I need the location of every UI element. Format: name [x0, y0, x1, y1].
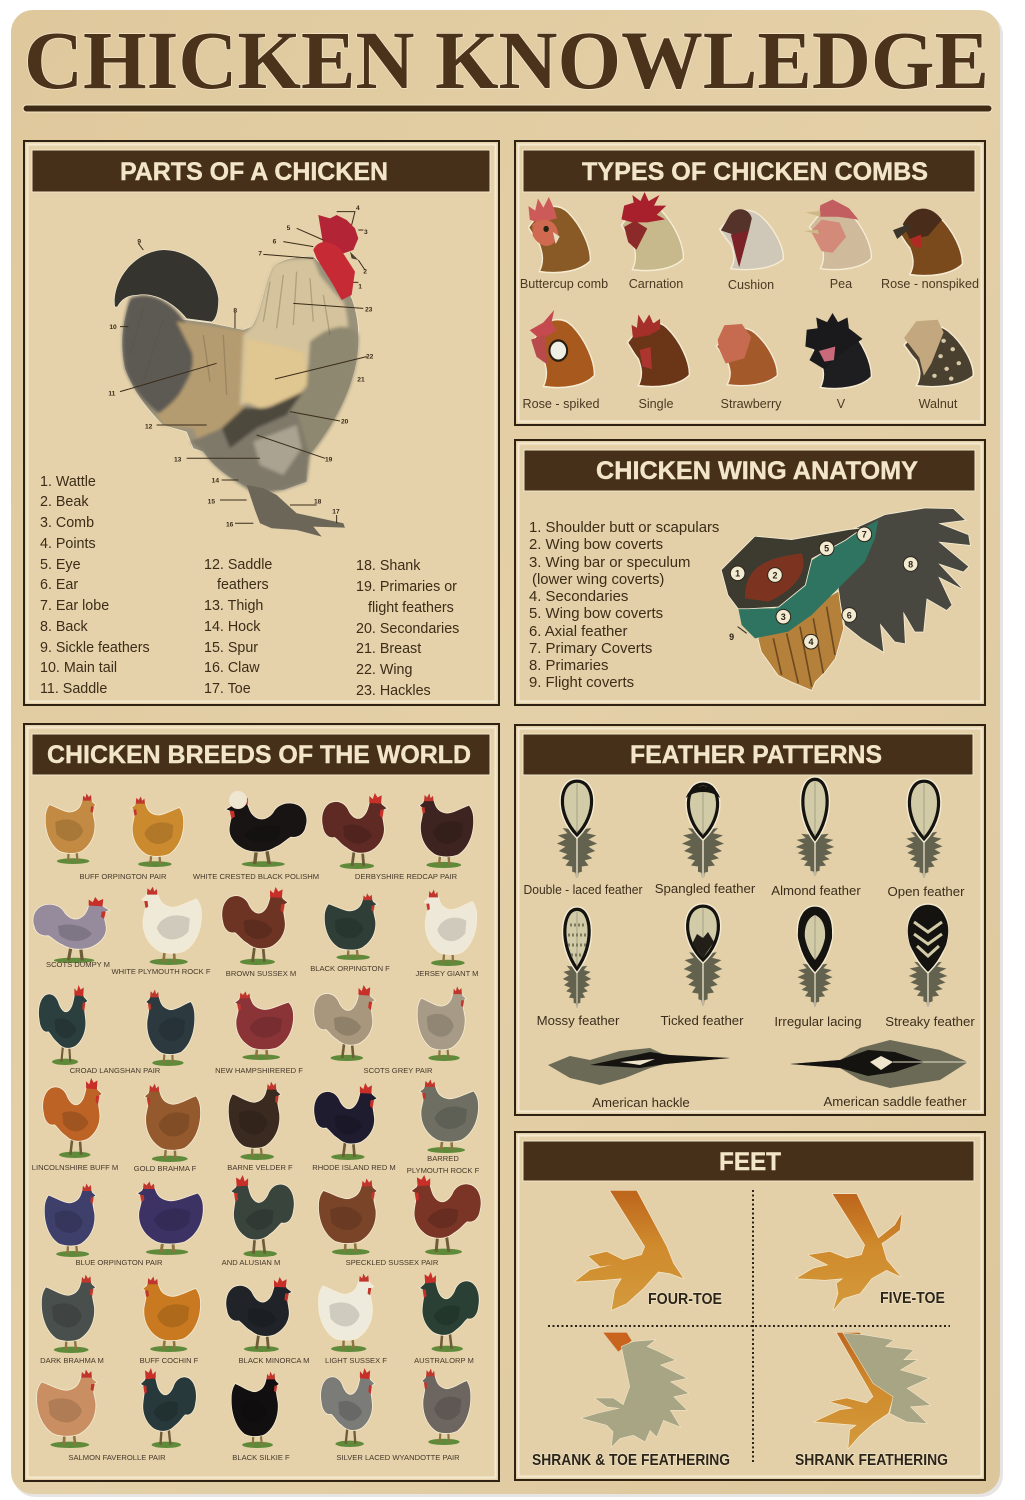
list: parts 18-23: 21. Breast [356, 641, 421, 657]
list: wing parts: 7. Primary Coverts [529, 641, 652, 657]
foot labels: FIVE-TOE [880, 1290, 945, 1307]
panel: feet [515, 1132, 985, 1480]
breed: andalusian [222, 1175, 294, 1267]
breed: silver laced wyandotte pair: SILVER LACED WYANDOTTE PAIR [336, 1453, 460, 1462]
diagram: rooster with numbered parts: 5 [287, 225, 291, 232]
breed: gold brahma: GOLD BRAHMA F [134, 1164, 197, 1173]
breed: scots grey pair [314, 985, 466, 1075]
dotted dividers [548, 1190, 950, 1462]
breed: australorp: AUSTRALORP M [414, 1356, 474, 1365]
diagram: wing with numbered parts: 9 [729, 632, 734, 642]
breed: dark brahma [40, 1275, 104, 1365]
list: parts 1-11: 11. Saddle [40, 681, 107, 697]
diagram: rooster with numbered parts: 2 [363, 268, 367, 275]
breed: gold brahma [134, 1084, 200, 1173]
diagram: rooster with numbered parts: 16 [226, 522, 234, 529]
diagram: rooster with numbered parts: 18 [314, 498, 322, 505]
comb labels: Strawberry [721, 397, 782, 411]
breed: jersey giant [415, 890, 479, 978]
feather: ticked: Ticked feather [660, 1013, 744, 1028]
feather: almond: Almond feather [771, 883, 861, 898]
title: CHICKEN KNOWLEDGE [24, 14, 989, 106]
diagram: rooster with numbered parts: 20 [341, 418, 349, 425]
diagram: rooster with numbered parts: 8 [233, 307, 237, 314]
breed: jersey giant: JERSEY GIANT M [415, 969, 479, 978]
diagram: wing with numbered parts: 2 [772, 570, 777, 580]
list: parts 18-23: flight feathers [368, 600, 454, 616]
breed: blue orpington pair: BLUE ORPINGTON PAIR [75, 1258, 163, 1267]
foot labels: SHRANK FEATHERING [795, 1452, 948, 1469]
list: wing parts: 2. Wing bow coverts [529, 537, 663, 553]
list: wing parts: 6. Axial feather [529, 624, 628, 640]
breed: australorp [414, 1272, 479, 1365]
diagram: wing with numbered parts: 7 [862, 530, 867, 540]
list: parts 18-23: 19. Primaries or [356, 579, 457, 595]
list: wing parts: 5. Wing bow coverts [529, 606, 663, 622]
list: parts 12-17: 13. Thigh [204, 598, 263, 614]
diagram: rooster with numbered parts: 11 [108, 391, 116, 398]
feather: streaky: Streaky feather [885, 1014, 975, 1029]
list: parts 1-11: 4. Points [40, 536, 96, 552]
breed: salmon faverolle pair [37, 1368, 196, 1462]
breed: rhode island red [312, 1083, 396, 1172]
comb: single [627, 314, 689, 387]
list: parts 12-17: 14. Hock [204, 619, 261, 635]
feather: spangled [655, 784, 756, 896]
list: parts 12-17: 12. Saddle [204, 557, 272, 573]
panel: feather patterns [515, 725, 985, 1115]
header: types of chicken combs [523, 150, 975, 192]
comb labels: Rose - nonspiked [881, 277, 979, 291]
list: parts 1-11: 8. Back [40, 619, 89, 635]
breed: white crested black polish: WHITE CRESTED BLACK POLISHM [193, 872, 319, 881]
breed: blue orpington pair [45, 1182, 203, 1267]
breed: black orpington [310, 893, 390, 973]
diagram: wing with numbered parts: 3 [781, 612, 786, 622]
comb: buttercup [528, 197, 590, 273]
panel: parts of a chicken [24, 141, 499, 705]
foot: four-toe [575, 1191, 683, 1310]
comb labels: Cushion [728, 278, 774, 292]
breed: scots dumpy [33, 897, 110, 969]
comb labels: Single [638, 397, 674, 411]
list: wing parts: 4. Secondaries [529, 589, 628, 605]
list: wing parts: 3. Wing bar or speculum [529, 555, 690, 571]
foot: shank and toe feathering [582, 1333, 688, 1447]
list: parts 18-23: 18. Shank [356, 558, 421, 574]
diagram: rooster with numbered parts: 9 [137, 238, 141, 245]
foot labels: SHRANK & TOE FEATHERING [532, 1452, 730, 1469]
header: feet: FEET [719, 1148, 781, 1176]
list: parts 12-17: 17. Toe [204, 681, 251, 697]
diagram: rooster with numbered parts: 6 [273, 238, 277, 245]
feather: spangled: Spangled feather [655, 881, 756, 896]
breed: brown sussex [222, 887, 296, 978]
comb labels: Pea [830, 277, 852, 291]
breed: buff cochin [140, 1277, 200, 1365]
breed: barnevelder: BARNE VELDER F [227, 1163, 293, 1172]
diagram: rooster with numbered parts: 13 [174, 457, 182, 464]
header: parts of a chicken: PARTS OF A CHICKEN [120, 158, 388, 186]
feather: american hackle: American hackle [592, 1095, 690, 1110]
breed: scots grey pair: SCOTS GREY PAIR [364, 1066, 433, 1075]
list: parts 1-11: 3. Comb [40, 515, 94, 531]
list: parts 1-11: 9. Sickle feathers [40, 640, 150, 656]
comb labels: Carnation [629, 277, 683, 291]
diagram: rooster with numbered parts: 22 [366, 353, 374, 360]
diagram: rooster with numbered parts: 3 [364, 229, 368, 236]
list: parts 1-11: 10. Main tail [40, 660, 117, 676]
list: wing parts: 1. Shoulder butt or scapulars [529, 520, 719, 536]
feather: double-laced: Double - laced feather [524, 882, 643, 897]
breed: barred plymouth rock: BARRED [427, 1154, 459, 1163]
diagram: rooster with numbered parts: 21 [357, 377, 365, 384]
feather: almond [771, 779, 861, 898]
list: wing parts: (lower wing coverts) [532, 572, 664, 588]
diagram: rooster with numbered parts: 14 [212, 477, 219, 484]
comb: walnut [904, 320, 973, 387]
breed: brown sussex: BROWN SUSSEX M [226, 969, 296, 978]
breed: buff orpington pair: BUFF ORPINGTON PAIR [79, 872, 167, 881]
breed: croad langshan pair: CROAD LANGSHAN PAIR [70, 1066, 161, 1075]
breed: barred plymouth rock: PLYMOUTH ROCK F [407, 1166, 480, 1175]
header: chicken wing anatomy [524, 450, 975, 491]
list: parts 1-11: 2. Beak [40, 494, 89, 510]
comb labels: Walnut [919, 397, 958, 411]
feather: open [888, 781, 965, 899]
breed: white plymouth rock [111, 887, 211, 976]
diagram: rooster with numbered parts: 19 [325, 457, 333, 464]
breed: black silkie [232, 1372, 290, 1462]
comb: strawberry [716, 324, 777, 386]
list: parts 12-17: 16. Claw [204, 660, 260, 676]
comb labels: V [837, 397, 846, 411]
breed: black minorca [226, 1277, 309, 1365]
list: parts 18-23: 20. Secondaries [356, 621, 459, 637]
list: parts 12-17: 15. Spur [204, 640, 258, 656]
breed: croad langshan pair [39, 985, 194, 1075]
comb labels: Rose - spiked [522, 397, 600, 411]
comb: cushion [720, 209, 783, 270]
diagram: wing with numbered parts: 5 [824, 544, 829, 554]
diagram: rooster with numbered parts: 17 [332, 508, 340, 515]
comb labels [520, 277, 979, 411]
header: chicken breeds of the world [32, 734, 490, 775]
header: feet [523, 1141, 974, 1181]
breed: black silkie: BLACK SILKIE F [232, 1453, 290, 1462]
diagram: wing with numbered parts [722, 508, 970, 690]
feather: ticked [660, 906, 744, 1028]
comb: carnation [621, 192, 683, 271]
breed: light sussex [319, 1274, 387, 1365]
comb: rose spiked [530, 310, 594, 388]
breed: new hampshire red: NEW HAMPSHIRERED F [215, 1066, 303, 1075]
feather: mossy: Mossy feather [537, 1013, 620, 1028]
diagram: rooster with numbered parts: 10 [109, 324, 117, 331]
header: feather patterns [523, 734, 973, 775]
feather: irregular lacing [774, 908, 862, 1029]
feather: streaky [885, 906, 975, 1029]
feather: open: Open feather [888, 884, 965, 899]
panel: chicken breeds of the world [24, 724, 499, 1481]
foot: shank feathering [815, 1333, 930, 1448]
breed: speckled sussex pair: SPECKLED SUSSEX PAIR [346, 1258, 439, 1267]
header: feather patterns: FEATHER PATTERNS [630, 741, 882, 769]
panel: types of chicken combs [515, 141, 985, 425]
diagram: rooster with numbered parts: 1 [358, 283, 362, 290]
diagram: rooster with numbered parts: 15 [208, 498, 215, 505]
breed: barred plymouth rock [407, 1080, 480, 1175]
list: parts 1-11: 1. Wattle [40, 474, 96, 490]
comb: rose nonspiked [893, 209, 962, 276]
list: parts 1-11: 7. Ear lobe [40, 598, 109, 614]
foot labels [532, 1290, 948, 1469]
breed: rhode island red: RHODE ISLAND RED M [312, 1163, 396, 1172]
breed: lincolnshire buff: LINCOLNSHIRE BUFF M [32, 1163, 118, 1172]
diagram: rooster with numbered parts [108, 205, 374, 537]
feather: double-laced [524, 781, 643, 897]
breed: black minorca: BLACK MINORCA M [239, 1356, 309, 1365]
breed: scots dumpy: SCOTS DUMPY M [46, 960, 110, 969]
feather: american saddle: American saddle feather [824, 1094, 967, 1109]
list: wing parts: 9. Flight coverts [529, 675, 634, 691]
breed: derbyshire redcap pair: DERBYSHIRE REDCAP PAIR [355, 872, 458, 881]
diagram: rooster with numbered parts: 12 [145, 423, 153, 430]
header: parts of a chicken [32, 150, 490, 192]
feather: irregular lacing: Irregular lacing [774, 1014, 862, 1029]
list: wing parts: 8. Primaries [529, 658, 608, 674]
breed: lincolnshire buff [32, 1078, 118, 1172]
breed: derbyshire redcap pair [322, 793, 473, 881]
foot: five-toe [797, 1194, 902, 1310]
list: parts 18-23: 22. Wing [356, 662, 412, 678]
breed: silver laced wyandotte pair [321, 1368, 470, 1462]
comb: pea [804, 199, 871, 270]
feather: american saddle [790, 1040, 968, 1109]
header: chicken breeds of the world: CHICKEN BREEDS OF THE WORLD [47, 741, 471, 769]
diagram: rooster with numbered parts: 23 [365, 307, 373, 314]
diagram: wing with numbered parts: 8 [908, 559, 913, 569]
list: parts 12-17: feathers [217, 577, 269, 593]
breed: light sussex: LIGHT SUSSEX F [325, 1356, 387, 1365]
header: chicken wing anatomy: CHICKEN WING ANATOMY [596, 457, 918, 485]
breed: salmon faverolle pair: SALMON FAVEROLLE PAIR [68, 1453, 166, 1462]
list: parts 18-23: 23. Hackles [356, 683, 431, 699]
breed: white crested black polish [193, 791, 319, 881]
breed: speckled sussex pair [319, 1175, 481, 1267]
foot labels: FOUR-TOE [648, 1291, 722, 1308]
breed: white plymouth rock: WHITE PLYMOUTH ROCK F [111, 967, 211, 976]
breed: new hampshire red [215, 991, 303, 1075]
breed: buff cochin: BUFF COCHIN F [140, 1356, 199, 1365]
comb: V [805, 313, 871, 389]
diagram: wing with numbered parts: 4 [808, 637, 813, 647]
diagram: wing with numbered parts: 6 [847, 610, 852, 620]
breed: buff orpington pair [46, 793, 183, 881]
header: types of chicken combs: TYPES OF CHICKEN COMBS [582, 158, 928, 186]
breed: black orpington: BLACK ORPINGTON F [310, 964, 390, 973]
comb labels: Buttercup comb [520, 277, 608, 291]
diagram: rooster with numbered parts: 4 [356, 205, 360, 212]
feather: american hackle [548, 1048, 730, 1110]
breed: dark brahma: DARK BRAHMA M [40, 1356, 104, 1365]
breed: barnevelder [227, 1082, 293, 1172]
list: parts 1-11: 6. Ear [40, 577, 78, 593]
feather: mossy [537, 909, 620, 1028]
diagram: wing with numbered parts: 1 [735, 569, 740, 579]
diagram: rooster with numbered parts: 7 [258, 251, 262, 258]
panel: chicken wing anatomy [515, 440, 985, 705]
list: parts 1-11: 5. Eye [40, 557, 81, 573]
breed: andalusian: AND ALUSIAN M [222, 1258, 280, 1267]
title rule [23, 105, 992, 112]
